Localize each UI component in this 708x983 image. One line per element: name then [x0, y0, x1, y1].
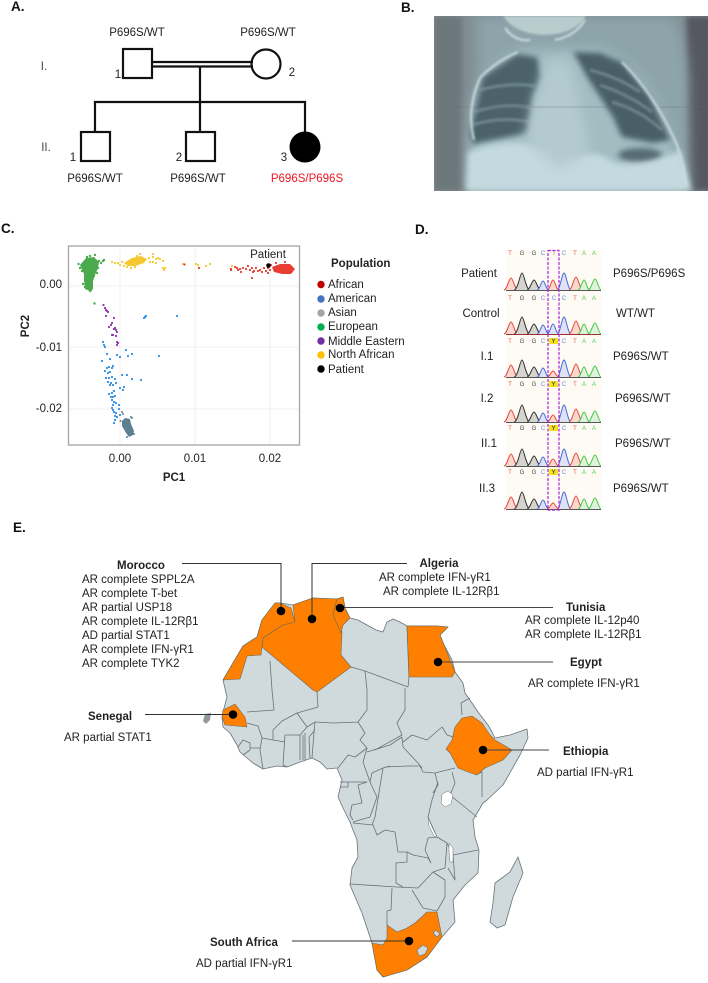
patient marker and label: Patient	[250, 249, 287, 261]
sample labels: I.1	[481, 351, 493, 363]
callout: Senegal	[64, 710, 237, 744]
genotype labels and numbering: 3	[281, 152, 287, 164]
callout: Morocco: AR complete IFN-γR1	[82, 644, 194, 656]
callout: Morocco: AD partial STAT1	[82, 630, 170, 642]
callout: Morocco: AR partial USP18	[82, 602, 172, 614]
trace: I.2	[504, 381, 601, 422]
genotype labels and numbering: 2	[176, 152, 182, 164]
axis tick labels: -0.01	[36, 342, 62, 354]
individual I.2 circle	[252, 50, 280, 78]
Cape Verde	[203, 713, 211, 724]
points: African	[184, 262, 295, 278]
axis tick labels: 0.00	[109, 453, 131, 465]
sample labels: II.1	[481, 438, 497, 450]
panel: Africa map	[203, 597, 528, 977]
axis titles: PC2	[20, 315, 32, 337]
panel label B: B.	[401, 0, 414, 15]
callout: Ethiopia	[479, 746, 634, 779]
panel label C: C.	[1, 221, 14, 236]
trace: I.1	[504, 338, 601, 378]
individual I.1 square	[123, 49, 152, 78]
individual II.2 square	[186, 132, 215, 161]
continent outline	[222, 597, 528, 977]
genotype labels and numbering: 2	[289, 67, 295, 79]
country: Egypt	[407, 626, 455, 677]
points: North African	[112, 254, 232, 270]
genotype labels: P696S/WT	[615, 393, 671, 405]
genotype labels: P696S/WT	[613, 483, 669, 495]
legend: population: Middle Eastern	[328, 336, 405, 348]
sample labels: Patient	[461, 268, 498, 280]
genotype labels	[613, 268, 686, 495]
individual II.3 filled circle	[290, 132, 320, 162]
country: South Africa	[372, 912, 442, 977]
points: American	[102, 316, 177, 423]
axis tick labels: 0.01	[184, 453, 206, 465]
trace: II.3: Y	[551, 470, 556, 476]
genotype labels: P696S/WT	[615, 438, 671, 450]
trace: I.2: Y	[551, 382, 556, 388]
trace: Patient: T	[552, 251, 556, 257]
callout: Algeria: Algeria	[420, 558, 459, 570]
panel label D: D.	[415, 222, 428, 237]
genotype labels: P696S/WT	[613, 351, 669, 363]
genotype labels: P696S/P696S	[613, 268, 686, 280]
panel label E: E.	[13, 520, 26, 535]
points: European	[78, 255, 104, 304]
country: Tunisia	[333, 597, 350, 633]
axis tick labels	[36, 279, 281, 465]
callout: Morocco: AR complete IL-12Rβ1	[82, 616, 199, 628]
country: Morocco and Western Sahara	[223, 603, 295, 680]
genotype labels and numbering: P696S/P696S	[271, 173, 343, 185]
callout: Senegal: AR partial STAT1	[64, 732, 152, 744]
panel: Sanger chromatograms	[461, 250, 686, 510]
legend: population: European	[328, 321, 378, 333]
callout: Algeria: AR complete IFN-γR1	[379, 572, 491, 584]
callout: South Africa	[196, 937, 413, 970]
lakes	[428, 791, 453, 862]
panel: PCA scatter plot	[20, 246, 300, 484]
legend: population: Patient	[328, 364, 365, 376]
axis tick labels: 0.00	[40, 279, 62, 291]
callout: Tunisia: Tunisia	[566, 602, 606, 614]
genotype labels: WT/WT	[616, 308, 655, 320]
callout: Morocco: Morocco	[117, 560, 165, 572]
callout: Tunisia: AR complete IL-12Rβ1	[525, 629, 642, 641]
callout: South Africa: AD partial IFN-γR1	[196, 958, 292, 970]
trace: I.1: Y	[551, 339, 556, 345]
patient marker and label	[250, 249, 287, 268]
callout: Egypt: Egypt	[570, 657, 602, 669]
highlighted mutation column	[548, 250, 559, 510]
sample labels	[461, 268, 500, 495]
callout: Ethiopia: Ethiopia	[563, 746, 609, 758]
points: Middle Eastern	[104, 305, 118, 345]
trace: Patient	[504, 251, 601, 290]
trace: II.3	[504, 469, 601, 510]
legend: population: Asian	[328, 307, 357, 319]
axis titles	[20, 315, 186, 484]
callout: Algeria: AR complete IL-12Rβ1	[383, 586, 500, 598]
callout: Morocco	[82, 560, 285, 670]
genotype labels and numbering: P696S/WT	[170, 173, 226, 185]
country borders	[238, 626, 482, 927]
country: Ethiopia	[446, 716, 512, 775]
genotype labels and numbering: 1	[70, 152, 76, 164]
genotype labels and numbering: P696S/WT	[109, 27, 165, 39]
Madagascar	[490, 857, 523, 928]
individual II.1 square	[81, 132, 110, 161]
country: Senegal	[222, 704, 247, 727]
sample labels: I.2	[481, 393, 493, 405]
callout: Tunisia	[336, 602, 642, 641]
genotype labels and numbering: I.	[41, 61, 47, 73]
callout: Morocco: AR complete T-bet	[82, 588, 178, 600]
plot frame and grid	[68, 246, 300, 445]
country: Algeria	[262, 598, 351, 692]
axis tick labels: -0.02	[36, 403, 62, 415]
legend: population: American	[328, 293, 377, 305]
callout: Morocco: AR complete SPPL2A	[82, 574, 195, 586]
callout: Tunisia: AR complete IL-12p40	[525, 615, 639, 627]
sample labels: Control	[462, 308, 500, 320]
trace: II.1: Y	[551, 426, 556, 432]
sample labels: II.3	[479, 483, 495, 495]
enclaves: Lesotho and Eswatini	[417, 930, 440, 956]
genotype labels and numbering: P696S/WT	[240, 27, 296, 39]
genotype labels and numbering: P696S/WT	[67, 173, 123, 185]
genotype labels and numbering: II.	[41, 142, 51, 154]
points: Asian	[120, 412, 134, 437]
axis titles: PC1	[163, 472, 186, 484]
callout: Egypt: AR complete IFN-γR1	[528, 678, 640, 690]
genotype labels and numbering: 1	[115, 69, 121, 81]
callout: Algeria	[308, 558, 500, 623]
trace: Control	[504, 296, 601, 334]
legend: population: Population	[331, 258, 390, 270]
callout: Ethiopia: AD partial IFN-γR1	[537, 767, 634, 779]
callout: Egypt	[434, 657, 640, 690]
chromatogram background	[506, 250, 601, 510]
pedigree connecting lines	[95, 62, 305, 132]
axis tick labels: 0.02	[259, 453, 281, 465]
legend: population: North African	[328, 349, 394, 361]
panel: pedigree	[41, 27, 343, 185]
legend: population	[317, 258, 405, 376]
trace: II.1	[504, 425, 601, 466]
callout: South Africa: South Africa	[210, 937, 279, 949]
panel: chest X-ray	[434, 16, 708, 191]
legend: population: African	[328, 279, 364, 291]
trace: Control: C	[552, 296, 557, 302]
callout: Morocco: AR complete TYK2	[82, 658, 180, 670]
callout: Senegal: Senegal	[88, 711, 132, 723]
genotype labels and numbering	[41, 27, 343, 185]
